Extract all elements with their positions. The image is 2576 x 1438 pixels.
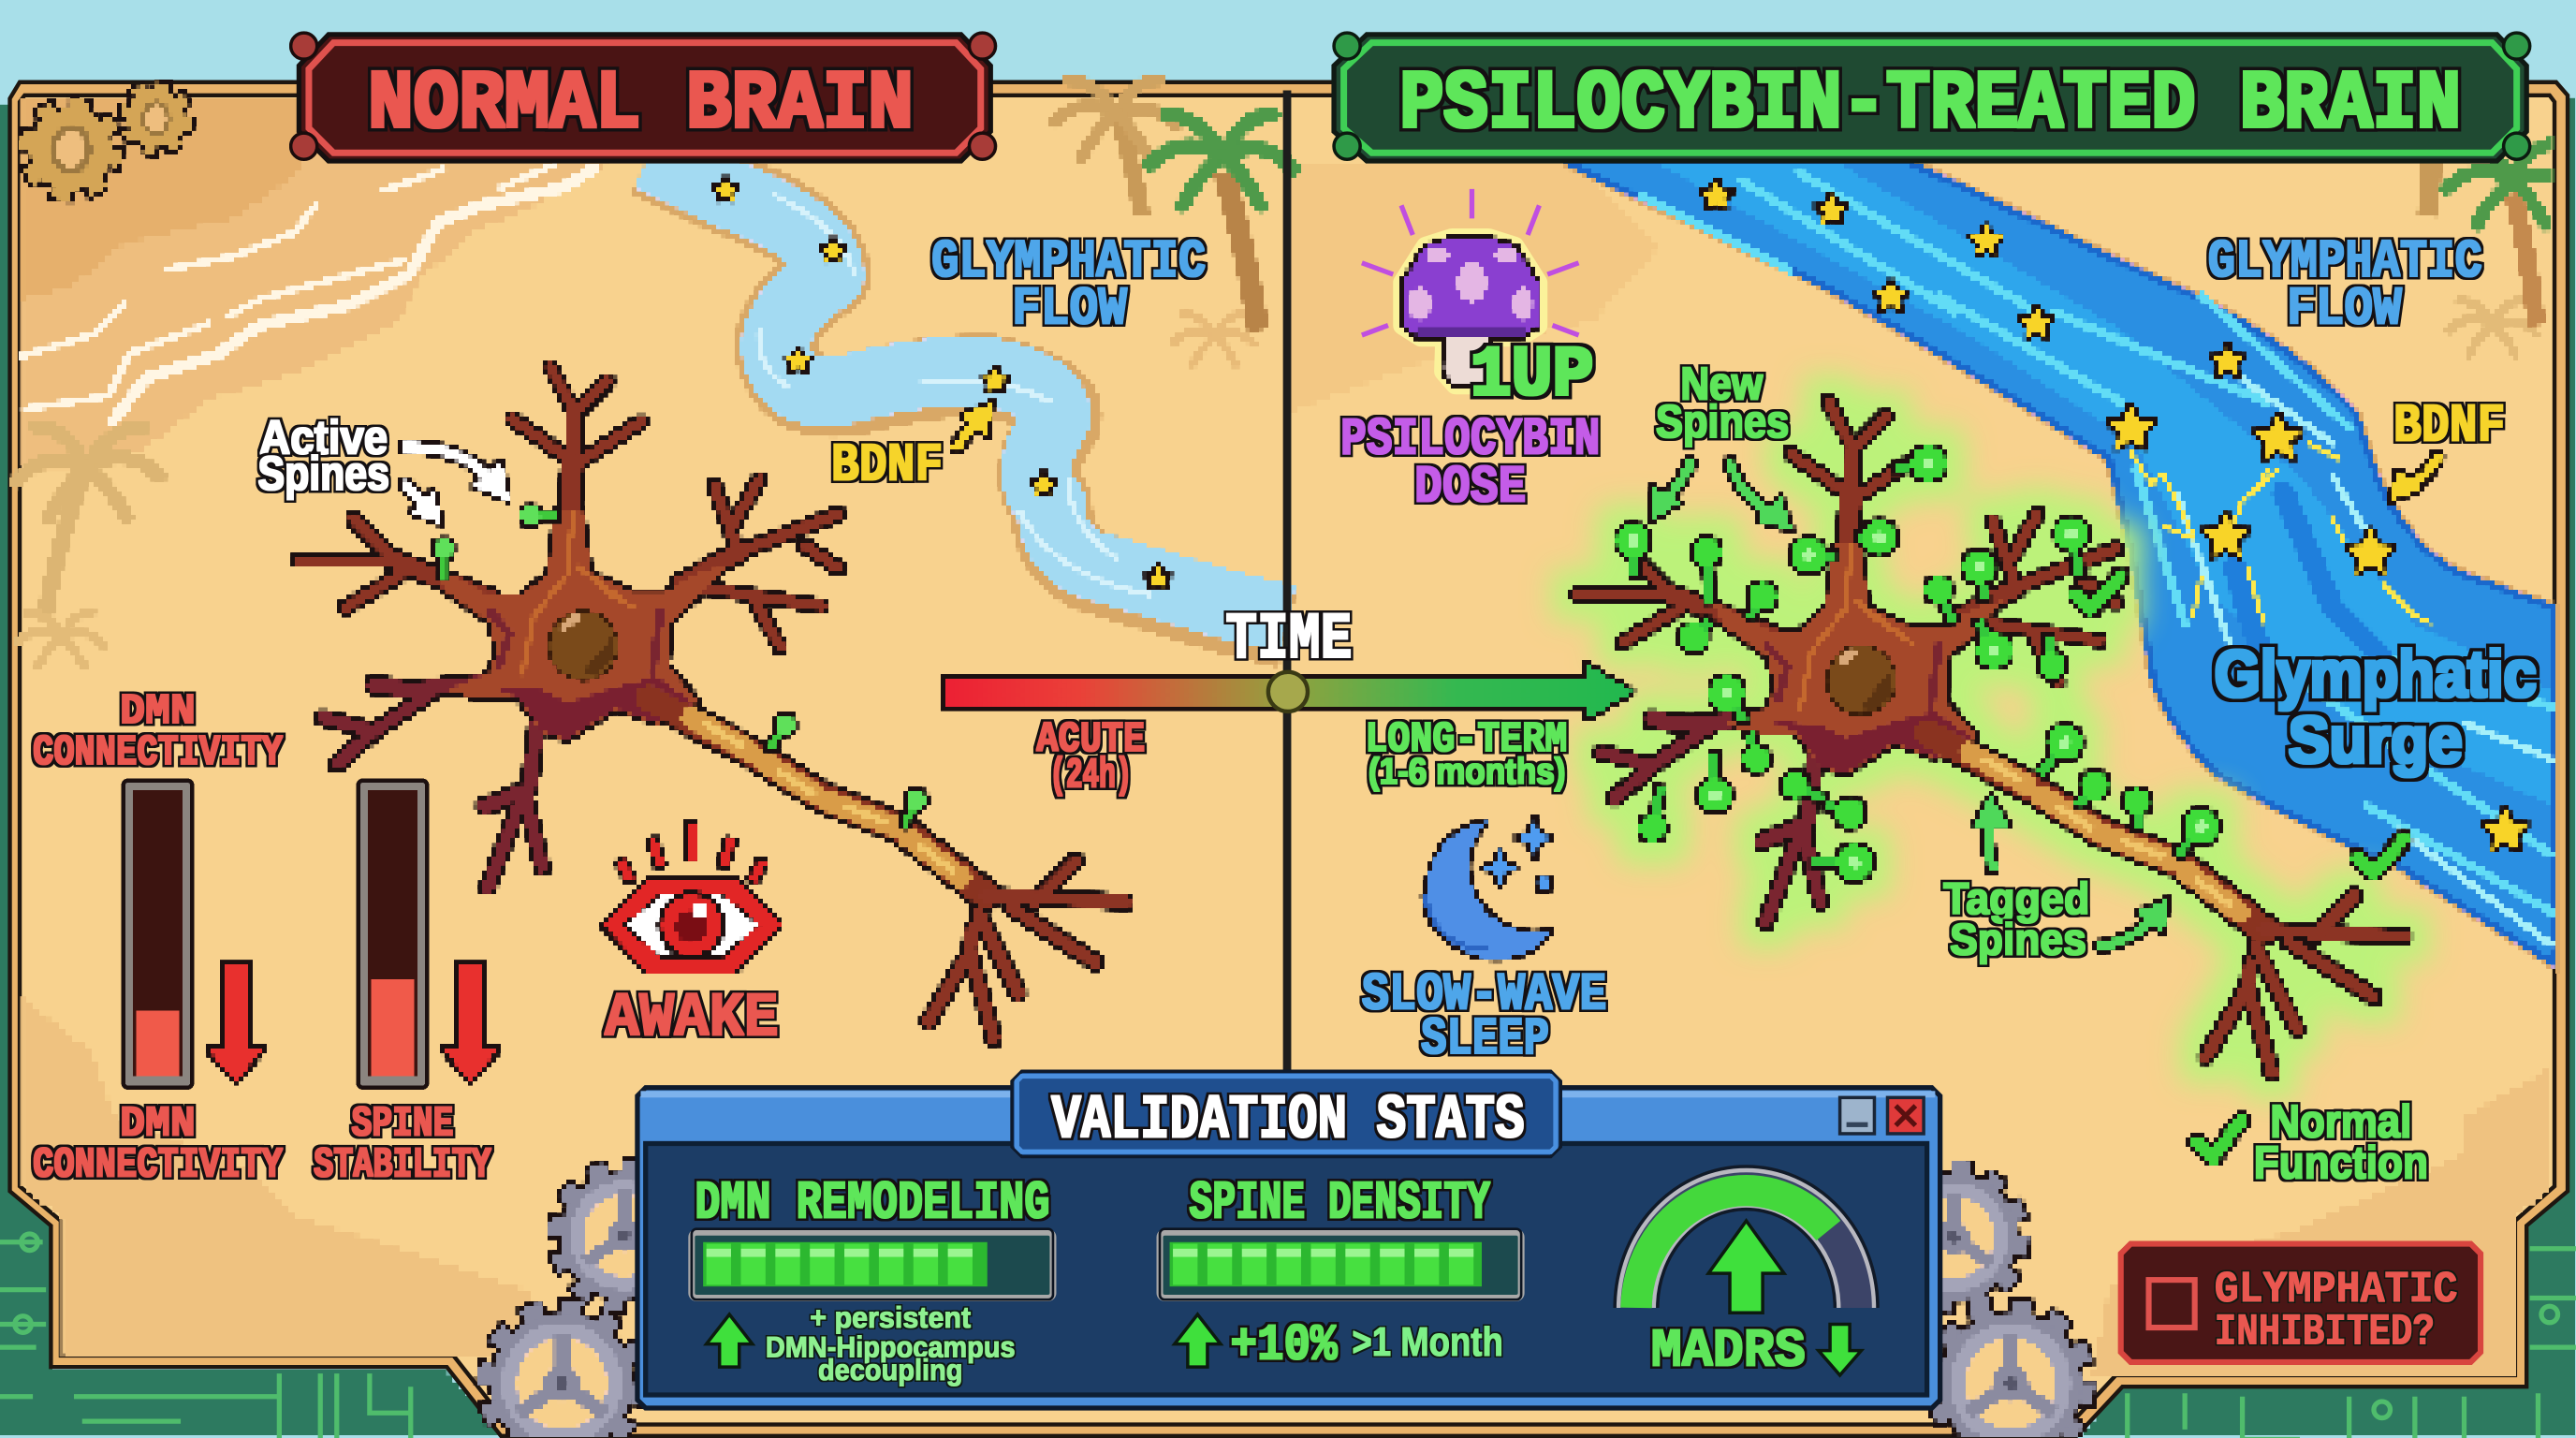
label: DMN connectivity bottom (33, 1100, 283, 1190)
stat: DMN remodeling: + persistent (810, 1300, 972, 1334)
circuit traces (0, 1234, 2576, 1438)
panel: psilocybin-treated brain (1340, 144, 2575, 1362)
label: 1UP: 1UP (1471, 335, 1593, 416)
label: new spines: Spines (1656, 397, 1789, 448)
gauge bar: DMN connectivity (124, 781, 192, 1088)
gears top-left (28, 88, 186, 192)
lightning sparks (2130, 444, 2431, 624)
neuron: normal (299, 366, 1125, 1038)
label: acute 24h: ACUTE (1036, 715, 1145, 764)
label: awake: AWAKE (605, 984, 779, 1055)
arrow: DMN down (207, 964, 265, 1081)
beach foam (22, 165, 593, 420)
arrows: tagged spines (1973, 795, 2169, 946)
label: normal function: Normal (2270, 1096, 2411, 1147)
label: DMN connectivity bottom: DMN (120, 1100, 196, 1149)
BDNF stars in river (714, 178, 1170, 588)
new and tagged spines on treated neuron (1617, 446, 2218, 881)
label: tagged spines: Spines (1950, 916, 2086, 965)
stat: spine density: >1 Month (1352, 1319, 1503, 1365)
gauge: MADRS (1636, 1188, 1861, 1382)
label: glymphatic flow: FLOW (1012, 280, 1127, 341)
label: tagged spines: Tagged (1943, 874, 2089, 924)
palm trees (17, 81, 1293, 668)
neuron: treated (1577, 401, 2404, 1073)
checkmark: neuron (2076, 575, 2121, 609)
label: glymphatic flow: FLOW (2287, 280, 2402, 341)
label: glymphatic flow (2208, 232, 2482, 341)
label: psilocybin dose (1340, 409, 1600, 517)
label: DMN connectivity bottom: CONNECTIVITY (33, 1141, 283, 1190)
label: glymphatic surge (2215, 637, 2537, 776)
label: acute 24h: (24h) (1049, 752, 1132, 800)
label: spine stability: STABILITY (314, 1141, 491, 1190)
callout: glymphatic inhibited: GLYMPHATIC (2215, 1266, 2457, 1315)
checkmark: normal function (2196, 1121, 2241, 1158)
label: glymphatic flow (931, 232, 1206, 341)
neuron glow (1577, 401, 2404, 1073)
label: active spines: Active (259, 410, 388, 463)
title: normal brain: NORMAL BRAIN (368, 59, 914, 152)
arrows: active spines (405, 447, 509, 524)
label: glymphatic surge: Surge (2289, 702, 2463, 776)
gauge bar: spine stability (359, 781, 427, 1088)
label: spine stability (314, 1100, 491, 1190)
palm trees (2428, 144, 2575, 355)
icon: mushroom 1UP (1362, 189, 1579, 385)
label: tagged spines (1943, 874, 2089, 965)
label: new spines (1656, 359, 1789, 448)
label: glymphatic flow: GLYMPHATIC (931, 232, 1206, 293)
label: psilocybin dose: DOSE (1414, 457, 1526, 517)
label: slow-wave sleep (1362, 965, 1606, 1069)
label: long-term 1-6 months (1365, 715, 1567, 792)
icon: crescent moon (1426, 818, 1552, 959)
label: glymphatic surge: Glymphatic (2215, 637, 2537, 711)
active spines on normal neuron (433, 506, 927, 827)
label: new spines: New (1680, 359, 1764, 409)
window tab: VALIDATION STATS (1051, 1085, 1525, 1156)
label: time: TIME (1225, 604, 1352, 678)
label: DMN connectivity top (33, 687, 283, 777)
window buttons (1840, 1097, 1924, 1134)
checkmark: river (2357, 840, 2404, 873)
window tab (1012, 1071, 1560, 1157)
label: DMN connectivity top: CONNECTIVITY (33, 728, 283, 777)
stat: DMN remodeling: DMN-Hippocampus (766, 1330, 1016, 1364)
arrow: BDNF (956, 403, 992, 447)
stat: DMN remodeling: decoupling (818, 1353, 962, 1387)
stat: spine density (1160, 1173, 1521, 1374)
label: DMN connectivity top: DMN (120, 687, 196, 736)
icon: awake eye (603, 823, 781, 973)
label: normal function: Function (2254, 1137, 2428, 1188)
label: glymphatic flow: GLYMPHATIC (2208, 232, 2482, 293)
river: glymphatic flow (649, 156, 1288, 627)
label: BDNF: BDNF (831, 435, 943, 496)
BDNF stars in surge (1701, 179, 2527, 850)
gears around stats window (490, 1170, 2083, 1438)
label: long-term 1-6 months: LONG-TERM (1365, 715, 1567, 764)
title: normal brain (291, 33, 996, 161)
arrows: new spines (1651, 463, 1793, 531)
stat: DMN remodeling: DMN REMODELING (695, 1173, 1049, 1234)
label: psilocybin dose: PSILOCYBIN (1340, 409, 1600, 469)
label: spine stability: SPINE (352, 1100, 453, 1149)
timeline: time arrow (944, 91, 1632, 1093)
gauge: MADRS: MADRS (1651, 1321, 1806, 1382)
river: glymphatic surge (1564, 161, 2553, 962)
label: active spines: Spines (258, 447, 389, 500)
label: active spines (258, 410, 389, 500)
stat: DMN remodeling (692, 1173, 1053, 1387)
label: long-term 1-6 months: (1-6 months) (1368, 752, 1566, 792)
label: slow-wave sleep: SLOW-WAVE (1362, 965, 1606, 1025)
callout: glymphatic inhibited (2121, 1244, 2481, 1362)
label: normal function (2254, 1096, 2428, 1188)
stat: spine density: +10% (1230, 1317, 1338, 1374)
arrow: BDNF (2391, 457, 2437, 501)
title: psilocybin-treated brain: PSILOCYBIN-TREATED BRAIN (1399, 59, 2461, 152)
arrow: spine stability down (442, 964, 500, 1081)
label: slow-wave sleep: SLEEP (1421, 1009, 1549, 1069)
callout: glymphatic inhibited: INHIBITED? (2215, 1309, 2435, 1358)
title: psilocybin-treated brain (1334, 33, 2530, 161)
panel: validation stats window (637, 1071, 1940, 1408)
panel: normal brain (17, 81, 1293, 1190)
stat: spine density: SPINE DENSITY (1190, 1173, 1490, 1234)
label: BDNF: BDNF (2393, 396, 2505, 457)
label: acute 24h (1036, 715, 1145, 800)
